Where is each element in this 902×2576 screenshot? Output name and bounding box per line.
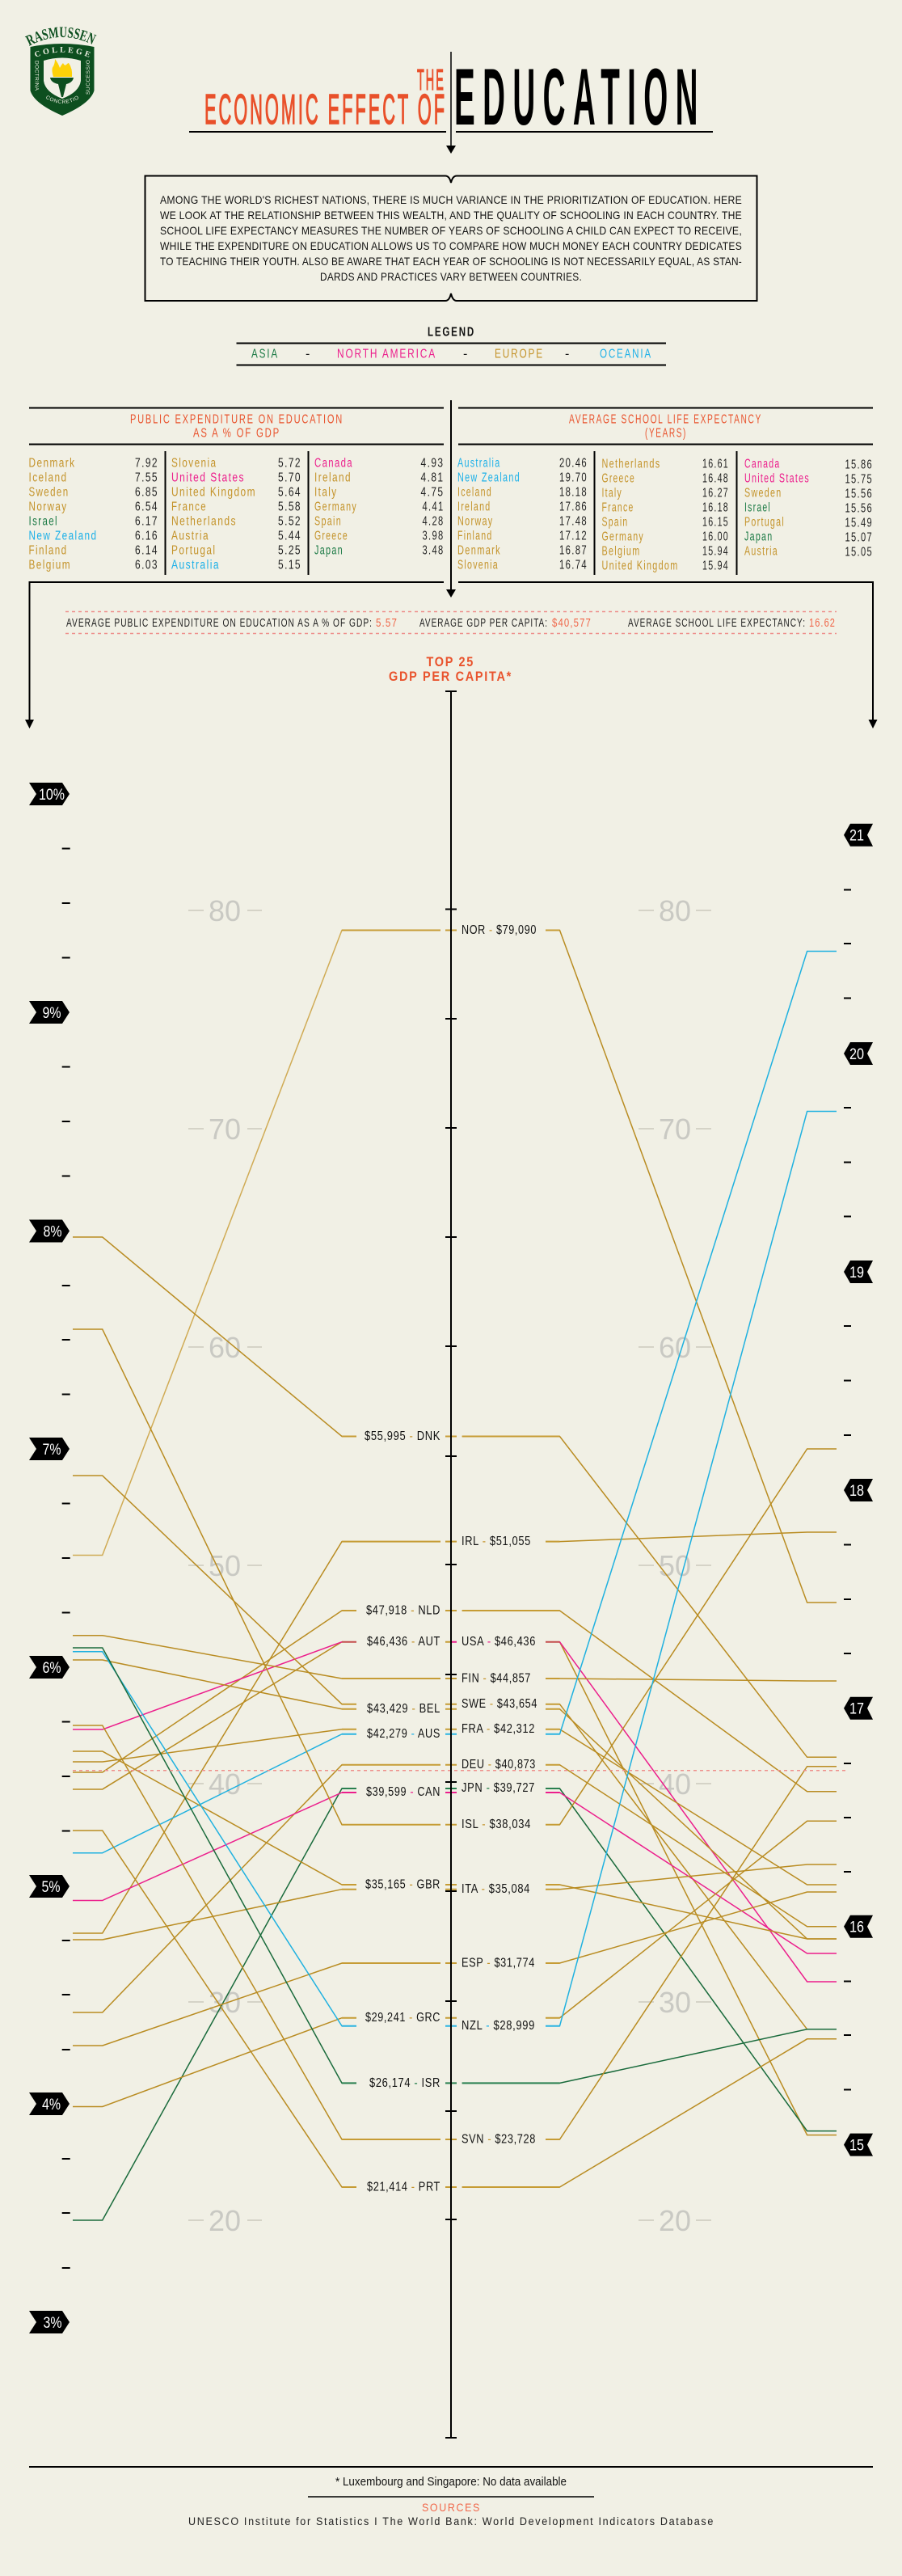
heading: top 25 GDP per capita: GDP PER CAPITA* <box>389 669 512 684</box>
column 3: Austria <box>744 545 778 558</box>
column 2: United Kingdom <box>171 485 256 500</box>
sources: SOURCES <box>422 2502 481 2514</box>
heading: top 25 GDP per capita: TOP 25 <box>427 654 474 669</box>
column 3: Japan <box>314 543 344 558</box>
column 3: 15.75 <box>845 472 873 487</box>
sources: UNESCO Institute for Statistics I The World Bank: World Development Indicators Database <box>188 2515 714 2527</box>
background GDP scale left: 60 <box>209 1331 241 1364</box>
intro text box <box>145 176 757 301</box>
column 3: 15.56 <box>845 487 873 501</box>
country line: France <box>73 1722 837 1885</box>
title <box>189 52 713 141</box>
column 3 <box>314 456 445 558</box>
badge: 16: 16 <box>849 1919 864 1936</box>
column 1: 6.03 <box>135 558 158 572</box>
title: EDUCATION <box>454 52 706 141</box>
country line: Canada: $39,599 - CAN <box>366 1785 440 1799</box>
heading: public expenditure: PUBLIC EXPENDITURE ON EDUCATION <box>130 412 344 427</box>
column 1: 17.48 <box>559 514 588 529</box>
column 3: 3.98 <box>422 529 445 543</box>
country line: Israel <box>73 1648 837 2090</box>
central GDP axis with ticks <box>445 691 457 2438</box>
column 3: Israel <box>744 501 771 514</box>
country line: Germany: DEU - $40,873 <box>462 1758 536 1772</box>
column 3: Canada <box>744 458 781 471</box>
column 3: Sweden <box>744 487 782 500</box>
badge: 6% <box>29 1656 70 1679</box>
column 3: 4.41 <box>422 500 445 514</box>
badge: 9% <box>29 1001 70 1024</box>
badge: 20: 20 <box>849 1046 864 1063</box>
country line: United Kingdom <box>73 1751 837 1939</box>
country line: Austria <box>73 1635 837 2135</box>
column 2: Greece <box>601 472 635 485</box>
column 1: 7.92 <box>135 456 158 471</box>
badge: 8% <box>29 1219 70 1242</box>
column 3: 15.05 <box>845 545 873 560</box>
badge: 5% <box>29 1875 70 1898</box>
column 1: Slovenia <box>457 558 499 572</box>
averages strip <box>65 611 837 634</box>
heading: school life expectancy: AVERAGE SCHOOL LIFE EXPECTANCY <box>569 412 762 427</box>
column 3: 4.75 <box>420 485 445 500</box>
expenditure scale: left axis ticks and badges <box>29 783 70 2333</box>
badge: 16 <box>844 1915 873 1938</box>
gold stubs beside the GDP axis <box>342 930 559 2187</box>
badge: 10%: 10% <box>39 787 65 804</box>
column 1: Denmark <box>29 456 76 471</box>
column 2: 5.44 <box>278 529 301 543</box>
badge: 21 <box>844 824 873 847</box>
country line: Portugal <box>73 1831 837 2194</box>
intro text box: WHILE THE EXPENDITURE ON EDUCATION ALLOWS US TO COMPARE HOW MUCH MONEY EACH COUNTRY DEDICATES <box>160 239 742 252</box>
logo: Rasmussen College shield <box>24 27 97 116</box>
country line: Spain: ESP - $31,774 <box>462 1957 535 1970</box>
badge: 6%: 6% <box>42 1660 61 1677</box>
country line: Greece <box>73 1821 837 2107</box>
column 1 <box>457 456 588 572</box>
averages strip: AVERAGE PUBLIC EXPENDITURE ON EDUCATION AS A % OF GDP: <box>66 617 373 630</box>
column 2: United Kingdom <box>601 560 679 572</box>
background GDP scale right: 70 <box>659 1113 691 1146</box>
column 1: Israel <box>29 514 58 529</box>
averages strip: AVERAGE GDP PER CAPITA: <box>419 617 548 630</box>
badge: 15: 15 <box>849 2138 864 2155</box>
country line: Portugal: $21,414 - PRT <box>367 2180 440 2194</box>
column 1: Denmark <box>457 543 501 558</box>
intro text box: WE LOOK AT THE RELATIONSHIP BETWEEN THIS WEALTH, AND THE QUALITY OF SCHOOLING IN EACH COUNTRY. THE <box>160 209 742 222</box>
background GDP scale left: 20 <box>209 2204 241 2237</box>
column 1: Finland <box>29 543 68 558</box>
school life scale: right axis ticks and badges <box>844 824 873 2156</box>
country line: Sweden <box>73 1476 837 2029</box>
badge: 18: 18 <box>849 1483 864 1500</box>
background GDP scale left: 50 <box>209 1549 241 1582</box>
column 1: 18.18 <box>559 485 588 500</box>
column 2: 16.00 <box>702 530 729 543</box>
column 1: 6.16 <box>135 529 158 543</box>
column 2: 16.27 <box>702 487 729 500</box>
country line: United Kingdom: $35,165 - GBR <box>365 1877 440 1892</box>
background GDP scale left: 80 <box>209 894 241 927</box>
country line: Greece: $29,241 - GRC <box>365 2011 440 2025</box>
background GDP scale right: 80 <box>659 894 691 927</box>
blue stubs beside the GDP axis <box>342 1734 559 2026</box>
column 3: Spain <box>314 514 342 529</box>
country line: Slovenia: SVN - $23,728 <box>462 2133 536 2146</box>
legend: - <box>306 348 312 361</box>
country line: Finland: FIN - $44,857 <box>462 1672 531 1685</box>
badge: 21: 21 <box>849 828 864 845</box>
column 3: 15.49 <box>845 516 873 530</box>
arrow: center divider between tables <box>446 400 456 598</box>
column 1: 19.70 <box>559 471 588 485</box>
footer rule <box>29 2466 873 2468</box>
column 2: Germany <box>601 530 644 543</box>
column 1 <box>29 456 158 572</box>
logo: Rasmussen College shield: COLLEGE <box>35 47 91 57</box>
badge: 18 <box>844 1479 873 1501</box>
country line: Germany <box>73 1758 837 2012</box>
background GDP scale right: 20 <box>659 2204 691 2237</box>
country line: Norway: NOR - $79,090 <box>462 923 537 937</box>
badge: 7% <box>29 1438 70 1460</box>
badge: 15 <box>844 2134 873 2156</box>
panel: public expenditure table <box>29 408 445 575</box>
column 1: 20.46 <box>559 456 588 471</box>
column 1: 17.12 <box>559 529 588 543</box>
column 3: Greece <box>314 529 348 543</box>
column 2: France <box>171 500 207 514</box>
logo: Rasmussen College shield: SUCCESSIO <box>86 60 91 95</box>
column 2: Belgium <box>601 545 640 558</box>
column 2: Austria <box>171 529 209 543</box>
column 3: Portugal <box>744 516 785 529</box>
background GDP scale left <box>188 894 262 2237</box>
averages strip: $40,577 <box>552 617 592 630</box>
arrow: title to intro <box>446 52 456 154</box>
column 1: 6.54 <box>135 500 158 514</box>
intro text box: DARDS AND PRACTICES VARY BETWEEN COUNTRIES. <box>320 270 582 283</box>
sources <box>188 2497 714 2527</box>
column 3 <box>744 458 873 560</box>
country line: Australia: $42,279 - AUS <box>367 1727 440 1741</box>
country line: Iceland <box>73 1329 837 1831</box>
column 2: Italy <box>601 487 622 500</box>
column 1: 16.74 <box>559 558 588 572</box>
column 1: 16.87 <box>559 543 588 558</box>
country line: Austria: $46,436 - AUT <box>367 1635 440 1649</box>
arrow: right bracket down to school life scale <box>458 582 878 728</box>
country line: Japan <box>73 1781 837 2220</box>
column 2: Portugal <box>171 543 217 558</box>
column 2: 5.15 <box>278 558 301 572</box>
column 1: New Zealand <box>457 471 521 485</box>
background GDP scale right <box>639 894 711 2237</box>
country line: Spain <box>73 1892 837 2046</box>
title: ECONOMIC EFFECT OF <box>204 87 447 133</box>
country line: France: FRA - $42,312 <box>462 1722 535 1736</box>
logo: Rasmussen College shield: CONCRETIO <box>46 95 78 103</box>
background GDP scale right: 30 <box>659 1986 691 2019</box>
country line: Canada <box>73 1785 837 1953</box>
column 2: 5.52 <box>278 514 301 529</box>
column 1: Finland <box>457 529 493 543</box>
country line: United States: USA - $46,436 <box>462 1635 536 1649</box>
column 3: 4.28 <box>422 514 445 529</box>
intro text box: AMONG THE WORLD'S RICHEST NATIONS, THERE IS MUCH VARIANCE IN THE PRIORITIZATION OF EDUCATION. HERE <box>160 193 742 206</box>
column 2: 15.94 <box>702 545 729 558</box>
country line: Netherlands: $47,918 - NLD <box>366 1604 440 1617</box>
column 1: 6.85 <box>135 485 158 500</box>
country line: Belgium: $43,429 - BEL <box>367 1702 440 1716</box>
legend: LEGEND <box>428 325 475 340</box>
badge: 20 <box>844 1042 873 1065</box>
shared red stubs for Austria and United States <box>342 1641 559 1643</box>
badge: 19 <box>844 1261 873 1283</box>
country line: Ireland <box>73 1532 837 1933</box>
column 2: Australia <box>171 558 220 572</box>
column 2: 5.70 <box>278 471 301 485</box>
column 3: 15.86 <box>845 458 873 472</box>
country line: Japan: JPN - $39,727 <box>462 1781 535 1795</box>
column 2: 16.48 <box>702 472 729 485</box>
background GDP scale left: 30 <box>209 1986 241 2019</box>
heading: public expenditure: AS A % OF GDP <box>193 427 280 440</box>
country line: Norway <box>73 923 837 1603</box>
column 3: Italy <box>314 485 338 500</box>
column 1: Belgium <box>29 558 71 572</box>
panel: school life expectancy table <box>457 408 873 575</box>
column 2: 5.72 <box>278 456 301 471</box>
column 2 <box>171 456 301 572</box>
background GDP scale right: 60 <box>659 1331 691 1364</box>
column 3: Japan <box>744 530 773 543</box>
country line: Finland <box>73 1636 837 1685</box>
country line: Italy <box>73 1864 837 1940</box>
column 1: Norway <box>29 500 68 514</box>
column 3: Germany <box>314 500 357 514</box>
column 2: 15.94 <box>702 560 729 572</box>
column 2: 5.25 <box>278 543 301 558</box>
column 3: United States <box>744 472 810 485</box>
badge: 4%: 4% <box>42 2097 61 2114</box>
logo: Rasmussen College shield: DOCTRINA <box>34 61 39 91</box>
arrow: left bracket down to expenditure scale <box>25 582 444 728</box>
column 2: 5.64 <box>278 485 301 500</box>
column 1: Iceland <box>29 471 68 485</box>
column 3: Canada <box>314 456 353 471</box>
column 3: Ireland <box>314 471 352 485</box>
column 1: Ireland <box>457 500 491 514</box>
column 1: Norway <box>457 514 493 529</box>
background GDP scale right: 50 <box>659 1549 691 1582</box>
country line: Belgium <box>73 1660 837 1939</box>
badge: 17: 17 <box>849 1701 864 1718</box>
legend: EUROPE <box>495 348 544 361</box>
country line: Australia <box>73 951 837 1853</box>
country line: Italy: ITA - $35,084 <box>462 1882 530 1896</box>
column 1: New Zealand <box>29 529 97 543</box>
column 1: 7.55 <box>135 471 158 485</box>
column 1: Iceland <box>457 485 492 500</box>
legend <box>236 325 666 365</box>
column 3: 15.07 <box>845 530 873 545</box>
column 1: Australia <box>457 456 501 471</box>
column 2: Netherlands <box>171 514 237 529</box>
badge: 9%: 9% <box>42 1005 61 1022</box>
title: THE <box>417 63 445 96</box>
column 2: 5.58 <box>278 500 301 514</box>
column 3: 15.56 <box>845 501 873 516</box>
column 3: 3.48 <box>422 543 445 558</box>
badge: 3% <box>29 2311 70 2333</box>
badge: 4% <box>29 2092 70 2115</box>
average GDP dashed line <box>73 1770 845 1772</box>
country line: Denmark: $55,995 - DNK <box>365 1429 440 1443</box>
country line: Israel: $26,174 - ISR <box>369 2076 440 2090</box>
averages strip: 5.57 <box>376 617 398 630</box>
heading: school life expectancy <box>569 412 762 440</box>
badge: 5%: 5% <box>42 1879 61 1896</box>
averages strip: 16.62 <box>809 617 836 630</box>
column 3: 4.93 <box>420 456 445 471</box>
country line: Netherlands <box>73 1604 837 1792</box>
background GDP scale left: 40 <box>209 1767 241 1801</box>
country line: New Zealand: NZL - $28,999 <box>462 2019 535 2033</box>
legend: ASIA <box>251 348 279 361</box>
badge: 19: 19 <box>849 1265 864 1282</box>
footnote: * Luxembourg and Singapore: No data available <box>335 2476 567 2489</box>
country line: Iceland: ISL - $38,034 <box>462 1818 531 1831</box>
column 2: Netherlands <box>601 458 661 471</box>
column 2: 16.18 <box>702 501 729 514</box>
column 2: Spain <box>601 516 629 529</box>
averages strip: AVERAGE SCHOOL LIFE EXPECTANCY: <box>628 617 806 630</box>
column 2: 16.61 <box>702 458 729 471</box>
column 2: France <box>601 501 634 514</box>
intro text box: SCHOOL LIFE EXPECTANCY MEASURES THE NUMBER OF YEARS OF SCHOOLING A CHILD CAN EXPECT TO RECEIVE, <box>160 224 742 237</box>
legend: OCEANIA <box>600 348 652 361</box>
logo: Rasmussen College shield: RASMUSSEN <box>24 27 97 46</box>
badge: 17 <box>844 1697 873 1720</box>
legend: NORTH AMERICA <box>337 348 436 361</box>
column 1: 17.86 <box>559 500 588 514</box>
green stubs beside the GDP axis <box>342 1788 559 2083</box>
country line: Denmark <box>73 1237 837 1757</box>
heading: top 25 GDP per capita <box>389 654 512 684</box>
column 2: United States <box>171 471 245 485</box>
heading: public expenditure <box>130 412 344 440</box>
column 1: 6.17 <box>135 514 158 529</box>
background GDP scale left: 70 <box>209 1113 241 1146</box>
legend: - <box>565 348 571 361</box>
legend: - <box>463 348 470 361</box>
background GDP scale right: 40 <box>659 1767 691 1801</box>
badge: 10% <box>29 783 70 805</box>
heading: school life expectancy: (YEARS) <box>645 427 687 440</box>
column 2: Slovenia <box>171 456 217 471</box>
badge: 7%: 7% <box>42 1442 61 1459</box>
country line: Sweden: SWE - $43,654 <box>462 1697 537 1711</box>
country line: Ireland: IRL - $51,055 <box>462 1535 531 1548</box>
badge: 3%: 3% <box>44 2315 62 2332</box>
column 3: 4.81 <box>420 471 445 485</box>
badge: 8%: 8% <box>44 1224 62 1240</box>
intro text box: TO TEACHING THEIR YOUTH. ALSO BE AWARE THAT EACH YEAR OF SCHOOLING IS NOT NECESSARILY EQUAL, AS STAN- <box>160 255 742 268</box>
pink stubs beside the GDP axis <box>342 1642 559 1793</box>
column 1: 6.14 <box>135 543 158 558</box>
column 1: Sweden <box>29 485 70 500</box>
country line: Slovenia <box>73 1725 837 2146</box>
column 2: 16.15 <box>702 516 729 529</box>
column 2 <box>601 458 729 572</box>
country line: United States <box>73 1635 837 1982</box>
